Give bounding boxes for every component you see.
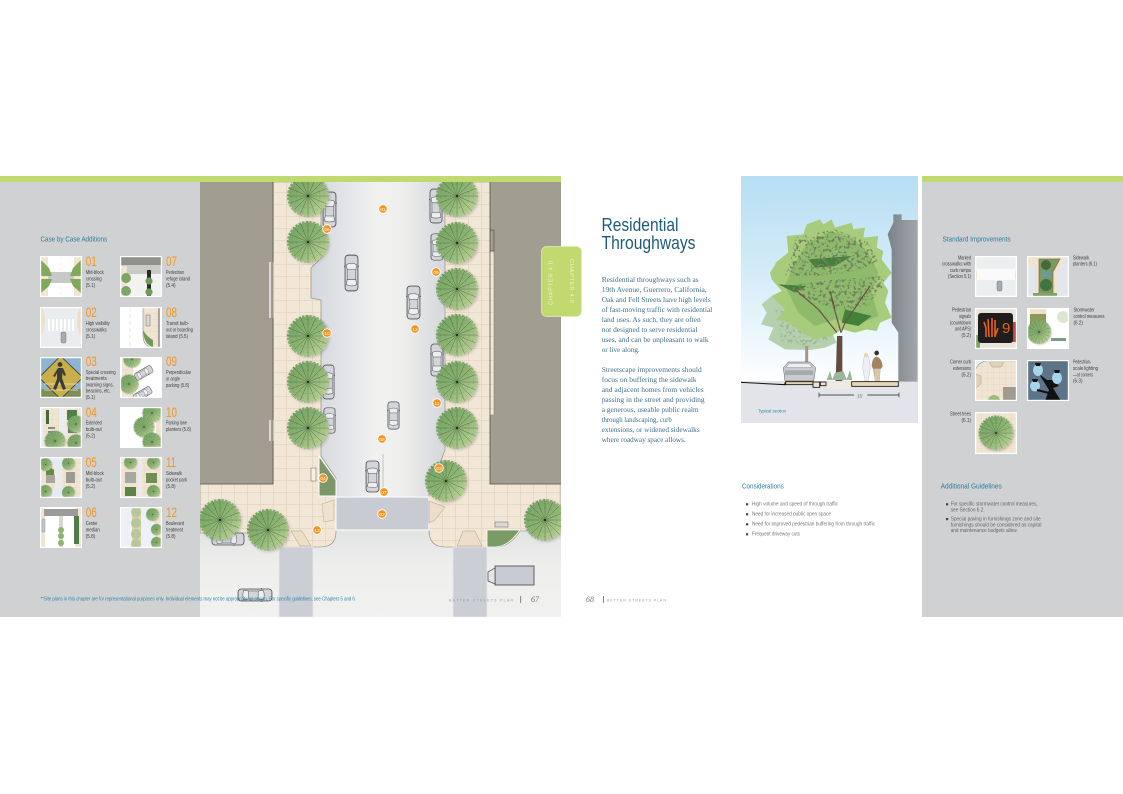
thumbnail 04 [40, 407, 82, 448]
numbered map markers: 02 [379, 512, 385, 518]
site plan map [199, 175, 567, 617]
item 02 high visibility crosswalks [40, 304, 110, 348]
caption 12: Boulevard [166, 521, 184, 527]
considerations list [746, 502, 875, 538]
caption 11: pocket park [166, 477, 187, 483]
heading: case by case additions: Case by Case Additions [40, 237, 108, 244]
additional guidelines list: and maintenance budgets allow. [951, 528, 1018, 534]
thumbnail 06 [40, 507, 82, 548]
second paragraph: Streetscape improvements should [602, 365, 702, 374]
numbered map markers: 07 [381, 490, 387, 496]
item: stormwater control measures [1027, 308, 1105, 349]
caption 06: Center [86, 521, 98, 527]
additional guidelines list: For specific stormwater control measures, [951, 502, 1038, 508]
caption 07: refuge island [166, 276, 190, 282]
caption [1074, 308, 1105, 326]
item 01 mid-block crossing [40, 253, 104, 297]
cars [212, 189, 534, 602]
green top band: left page [0, 176, 561, 182]
second paragraph: focus on buffering the sidewalk [602, 375, 697, 384]
chapter tab: CHAPTER 4.0 [548, 260, 554, 305]
caption 05: Mid-block [86, 471, 104, 477]
second paragraph: and adjacent homes from vehicles [602, 385, 704, 394]
caption 04: (5.2) [86, 433, 95, 439]
caption: Marked [958, 255, 971, 261]
second paragraph: passing in the street and providing [602, 395, 705, 404]
second paragraph [602, 365, 705, 444]
numbered map markers: 01 [380, 207, 386, 213]
caption 03: (5.1) [86, 395, 95, 401]
thumbnail 03 [40, 357, 82, 398]
thumbnail 11 [120, 457, 162, 498]
numbered map markers: 13 [314, 528, 320, 534]
street section illustration: 15' [857, 394, 863, 398]
intro paragraph: uses, and can be unpleasant to walk [602, 335, 709, 344]
grey side panel: right page [922, 176, 1123, 617]
thumbnail: lamp photo [1027, 360, 1069, 401]
intro paragraph: of fast-moving traffic with residential [602, 305, 712, 314]
footer: right page [586, 595, 667, 604]
caption 09: parking (5.8) [166, 383, 189, 389]
additional guidelines list: furnishings should be considered as capital [951, 522, 1041, 528]
additional guidelines list: see Section 6.2. [951, 508, 985, 514]
caption [950, 308, 971, 339]
caption 01 [86, 270, 104, 289]
caption: Corner curb [950, 360, 971, 366]
item 07 pedestrian refuge island [120, 253, 190, 297]
additional guidelines list [946, 502, 1041, 534]
title: Throughways [602, 233, 696, 253]
street section illustration [741, 176, 918, 423]
number 05: 05 [86, 454, 97, 470]
number 10: 10 [166, 404, 177, 420]
caption 06 [86, 521, 100, 540]
numbered map markers: 03 [436, 466, 442, 472]
thumbnail 02 [40, 307, 82, 348]
number 12: 12 [166, 504, 177, 520]
item: pedestrian signals [950, 308, 1017, 349]
second paragraph: through landscaping, curb [602, 415, 672, 424]
caption 01: (5.1) [86, 283, 95, 289]
caption: crosswalks with [942, 262, 971, 268]
thumbnail [1027, 308, 1069, 349]
thumbnail 07 [120, 256, 162, 297]
caption 04 [86, 421, 102, 439]
item 06 center median [40, 504, 100, 548]
chapter tab [542, 246, 582, 316]
section caption: Typical section [758, 408, 786, 414]
footer: left page: 67 [531, 595, 540, 604]
numbered map markers: 10 [324, 331, 330, 337]
thumbnail 01 [40, 256, 82, 297]
grey side panel: left page [0, 182, 200, 617]
caption 07: Pedestrian [166, 270, 184, 276]
caption 11: Sidewalk [166, 471, 182, 477]
second paragraph: where roadway space allows. [602, 435, 686, 444]
caption 08 [166, 321, 193, 340]
caption: (countdown [950, 320, 971, 326]
footer: right page: 68 [586, 595, 594, 604]
number 01: 01 [86, 253, 97, 269]
caption 03 [86, 370, 116, 401]
numbered map markers: 04 [320, 476, 326, 482]
footer: right page: BETTER STREETS PLAN [607, 598, 667, 602]
thumbnail [1027, 256, 1069, 297]
numbered map markers: 06 [324, 227, 330, 233]
caption: (Section 5.1) [948, 274, 971, 280]
item: street trees [950, 412, 1017, 454]
caption 03: Special crossing [86, 370, 116, 376]
numbered map markers [313, 205, 443, 534]
heading: standard improvements: Standard Improvements [942, 237, 1011, 244]
caption 10: Parking lane [166, 421, 187, 427]
caption 08: island (5.5) [166, 334, 188, 340]
caption 08: Transit bulb- [166, 321, 189, 327]
numbered map markers: 08 [379, 437, 385, 443]
green top band: right page [922, 176, 1123, 182]
footer: left page [449, 595, 540, 604]
intro paragraph [602, 275, 712, 354]
caption: (6.2) [1074, 320, 1083, 326]
numbered map markers: 05 [433, 270, 439, 276]
footer: left page: BETTER STREETS PLAN [449, 598, 514, 602]
number 03: 03 [86, 353, 97, 369]
caption 05: (5.2) [86, 484, 95, 490]
intro paragraph: land uses. As such, they are often [602, 315, 701, 324]
caption 02: (5.1) [86, 334, 95, 340]
second paragraph: a generous, useable public realm [602, 405, 699, 414]
chapter tab: CHAPTER 4.0 [568, 259, 574, 304]
item: marked crosswalks [942, 255, 1017, 297]
considerations list: High volume and speed of through traffic [752, 502, 838, 508]
caption: Street trees [950, 412, 971, 418]
thumbnail 08 [120, 307, 162, 348]
caption 07: (5.4) [166, 283, 176, 289]
caption 10 [166, 421, 191, 433]
intro paragraph: Oak and Fell Streets have high levels [602, 295, 711, 304]
item 04 extended bulb-out [40, 404, 102, 452]
number 06: 06 [86, 504, 97, 520]
intro paragraph: 19th Avenue, Guerrero, California, [602, 285, 707, 294]
caption 09 [166, 370, 191, 389]
title [602, 215, 696, 253]
caption [950, 412, 971, 424]
caption 11: (5.8) [166, 484, 176, 490]
caption 06: median [86, 527, 100, 533]
item 03 special crossing treatments [39, 353, 116, 401]
caption 03: beacons, etc. [86, 389, 111, 395]
caption [950, 360, 971, 378]
thumbnail 10 [120, 407, 162, 448]
item: corner curb extensions [950, 360, 1017, 407]
item 09 perpendicular or angle parking [119, 350, 191, 403]
caption 07 [166, 270, 190, 289]
numbered map markers: 12 [412, 327, 418, 333]
thumbnail [975, 412, 1017, 454]
caption: scale lighting [1073, 366, 1098, 372]
caption: Stormwater [1074, 308, 1095, 314]
thumbnail 12 [120, 507, 162, 548]
item 11 sidewalk pocket park [120, 454, 187, 498]
caption: Pedestrian- [1073, 360, 1091, 366]
item 12 boulevard treatment [120, 504, 184, 549]
caption: control measures [1074, 314, 1105, 320]
caption 11 [166, 471, 187, 490]
intro paragraph: or live along. [602, 345, 640, 354]
number 08: 08 [166, 304, 177, 320]
caption [942, 255, 971, 280]
caption 12: (5.8) [166, 534, 176, 540]
additional guidelines list: Special paving in furnishings zone and site [951, 516, 1041, 522]
footnote: **Site plans in this chapter are for representational purposes only. Individual elements may not be appropriate as shown. For specific guidelines, see Chapters 5 and 6. [40, 596, 356, 602]
bioswale planters [311, 456, 520, 547]
caption: curb ramps [950, 268, 971, 274]
caption: (5.2) [962, 333, 971, 339]
caption 03: treatments [86, 376, 107, 382]
thumbnail [975, 360, 1017, 401]
caption: —at corners [1073, 372, 1093, 378]
street trees [199, 175, 567, 552]
caption 09: or angle [166, 376, 180, 382]
caption 12 [166, 521, 184, 540]
caption 04: Extended [86, 421, 102, 427]
caption [1073, 255, 1097, 268]
item 10 parking lane planters [120, 403, 191, 452]
caption: Sidewalk [1073, 255, 1089, 261]
item 08 transit bulb-out [120, 304, 193, 348]
caption: (6.3) [1073, 379, 1083, 385]
caption 05 [86, 471, 104, 490]
caption: Pedestrian [952, 308, 971, 314]
caption: (5.2) [962, 372, 971, 378]
caption 12: treatment [166, 527, 183, 533]
caption 02: crosswalks [86, 327, 107, 333]
caption 10: planters (5.8) [166, 427, 191, 433]
number 04: 04 [86, 404, 97, 420]
heading: considerations: Considerations [742, 484, 784, 490]
caption 01: Mid-block [86, 270, 104, 276]
item 05 mid-block bulb-out [39, 454, 104, 499]
number 07: 07 [166, 253, 177, 269]
caption: planters (6.1) [1073, 262, 1097, 268]
caption: signals [959, 314, 971, 320]
caption 05: bulb-out [86, 477, 102, 483]
thumbnail 09 [120, 357, 162, 398]
caption 02 [86, 321, 110, 340]
caption 02: High visibility [86, 321, 110, 327]
caption 08: out or boarding [166, 327, 193, 333]
caption 01: crossing [86, 276, 102, 282]
number 02: 02 [86, 304, 97, 320]
caption 06: (5.8) [86, 534, 95, 540]
number 09: 09 [166, 353, 177, 369]
caption: (6.1) [962, 418, 971, 424]
caption: and APS) [955, 327, 971, 333]
considerations list: Frequent driveway cuts [752, 532, 800, 538]
caption 09: Perpendicular [166, 370, 191, 376]
considerations list: Need for improved pedestrian buffering from through traffic [752, 522, 875, 528]
heading: additional guidelines: Additional Guidelines [941, 484, 1002, 490]
intro paragraph: Residential throughways such as [602, 275, 699, 284]
title: Residential [602, 215, 678, 235]
caption: extensions [953, 366, 971, 372]
item: pedestrian-scale lighting [1027, 360, 1098, 401]
thumbnail: countdown signal: 9 [1002, 320, 1010, 337]
second paragraph: extensions, or widened sidewalks [602, 425, 700, 434]
thumbnail [975, 256, 1017, 297]
caption 03: (warning signs, [86, 382, 114, 388]
number 11: 11 [166, 454, 176, 470]
thumbnail 05 [40, 457, 82, 498]
caption [1073, 360, 1098, 385]
considerations list: Need for increased public open space [752, 512, 831, 518]
intro paragraph: not designed to serve residential [602, 325, 698, 334]
numbered map markers: 11 [435, 401, 440, 407]
caption 04: bulb-out [86, 427, 102, 433]
item: sidewalk planters [1027, 255, 1097, 297]
